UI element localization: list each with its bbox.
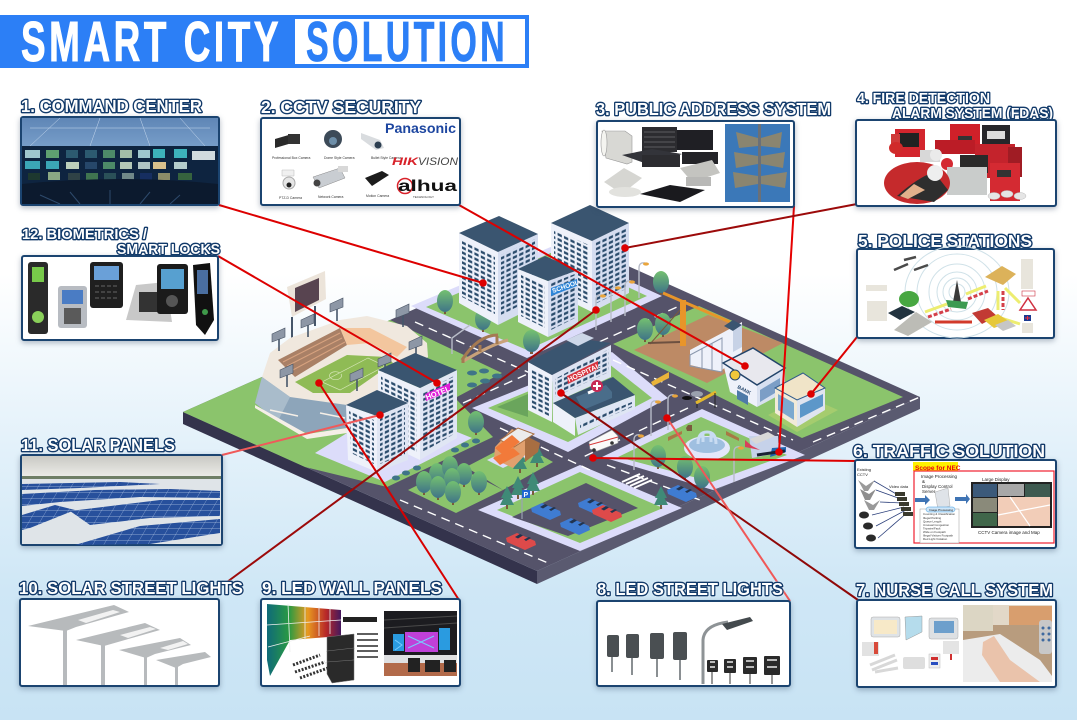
school building xyxy=(518,256,580,337)
title banner: SOLUTION xyxy=(306,10,508,74)
panel: 3 public address system xyxy=(596,99,831,207)
existing cctv cameras xyxy=(857,467,908,542)
server: Display Control xyxy=(922,484,953,489)
stadium outer ring xyxy=(262,316,428,406)
line 12 xyxy=(218,256,437,383)
line 9 xyxy=(319,383,459,600)
arrows xyxy=(915,494,970,505)
patient photo xyxy=(963,605,1052,682)
hotel sidewalk xyxy=(315,425,472,482)
line 6 xyxy=(593,458,856,461)
heading 5: 5. POLICE STATIONS xyxy=(858,231,1032,251)
server: & xyxy=(922,479,925,484)
warning signs xyxy=(1020,298,1036,321)
panel: 2 cctv security xyxy=(261,97,460,205)
line 7 xyxy=(561,393,858,600)
existing cctv cameras: Existing xyxy=(857,467,871,472)
led light heads xyxy=(607,632,687,680)
mount bars xyxy=(357,634,378,657)
controller unit xyxy=(343,617,377,622)
map platform xyxy=(183,240,920,584)
image processing list: Illegal Parking xyxy=(923,516,942,520)
panel: 11 solar panels xyxy=(21,435,222,545)
tree and car xyxy=(888,291,932,336)
server: Server xyxy=(922,489,936,494)
ambulance xyxy=(589,430,618,452)
title banner: SMART CITY xyxy=(21,10,282,74)
brand logos: alhua xyxy=(398,178,457,195)
line 11 xyxy=(222,415,380,455)
heading 7: 7. NURSE CALL SYSTEM xyxy=(856,580,1053,600)
scoreboard xyxy=(287,271,326,342)
camera captions: Bullet Style Camera xyxy=(371,156,401,160)
solar light 1 xyxy=(28,605,129,685)
heading 12: SMART LOCKS xyxy=(117,241,220,258)
panel: 6 traffic solution xyxy=(853,441,1056,548)
police station building xyxy=(768,373,838,432)
construction and bank block ground xyxy=(613,306,903,438)
hospital block ground xyxy=(472,352,668,452)
bus stop xyxy=(745,432,786,458)
heading 9: 9. LED WALL PANELS xyxy=(262,578,442,598)
tower block ground xyxy=(411,246,662,358)
image processing list: Red Light Violation xyxy=(923,537,948,541)
console desk xyxy=(22,179,218,204)
brand logos: VISION xyxy=(418,156,458,168)
solar light 3 xyxy=(119,638,191,685)
hospital building xyxy=(528,333,635,436)
brand logos: HIK xyxy=(392,156,419,168)
fountain park block ground xyxy=(602,409,805,490)
large display: Large Display xyxy=(982,477,1010,482)
hospital annex xyxy=(553,377,635,436)
stadium outer wall xyxy=(255,377,347,439)
line 10 xyxy=(227,310,596,582)
heading 12: 12. BIOMETRICS / xyxy=(22,226,148,243)
image processing list: Unusual Congestion xyxy=(923,523,949,527)
led video wall xyxy=(267,604,341,676)
hospital building: HOSPITAL xyxy=(567,362,602,384)
front tower xyxy=(346,390,408,472)
scope frame xyxy=(914,471,1054,543)
panel: 9 led wall panels xyxy=(261,578,460,686)
audio rack equipment xyxy=(604,127,720,202)
panel: 10 solar street lights xyxy=(19,578,243,686)
line 5 xyxy=(811,337,857,394)
tower crane xyxy=(648,293,730,346)
shop building xyxy=(493,428,540,468)
solar light 2 xyxy=(76,623,160,685)
construction site xyxy=(648,293,742,372)
heading 8: 8. LED STREET LIGHTS xyxy=(597,579,783,599)
school building: SCHOOL xyxy=(551,279,580,295)
signal rings xyxy=(905,246,1009,338)
camera captions: PTZ-D Camera xyxy=(279,196,302,200)
line 2 xyxy=(459,205,745,366)
flight cases xyxy=(327,634,354,683)
monitor wall xyxy=(25,149,215,180)
brand logos: TECHNOLOGY xyxy=(413,195,434,199)
camera captions: Motion Camera xyxy=(366,194,389,198)
stadium block ground xyxy=(183,320,502,487)
line 3 xyxy=(779,206,794,452)
image processing list: Counting & Classification xyxy=(923,512,956,516)
heading 10: 10. SOLAR STREET LIGHTS xyxy=(19,578,243,598)
medical cross sign xyxy=(591,380,603,392)
image processing list: Tripwire/Fault xyxy=(923,526,941,530)
scope label: Scope for NEC xyxy=(915,465,961,472)
heading 11: 11. SOLAR PANELS xyxy=(21,435,175,455)
video data encoders xyxy=(889,484,913,516)
heading 4 xyxy=(857,90,1053,122)
smoke detectors xyxy=(988,190,1026,200)
road barriers and manhole xyxy=(651,372,716,408)
panel: 7 nurse call system xyxy=(856,580,1056,687)
sky xyxy=(22,456,221,478)
camera captions xyxy=(272,156,401,200)
floodlights xyxy=(272,298,422,391)
image processing list: Queue Length xyxy=(923,520,942,524)
brand logos xyxy=(385,121,458,199)
red fire alarm panels xyxy=(889,124,1022,201)
camera captions: Network Camera xyxy=(318,195,344,199)
horn speaker xyxy=(602,131,632,164)
roof xyxy=(22,479,221,544)
control room xyxy=(985,266,1016,285)
image processing list xyxy=(920,507,959,543)
stage photo xyxy=(384,611,457,676)
horizon trees xyxy=(22,476,221,479)
solar led heads xyxy=(707,656,780,684)
emergency vehicles xyxy=(972,308,1016,331)
solar light 4 xyxy=(156,652,211,685)
satellites xyxy=(894,257,928,270)
panel: 4 fire detection alarm system xyxy=(856,90,1056,206)
camera captions: Professional Box Camera xyxy=(272,156,311,160)
heading 4: ALARM SYSTEM (FDAS) xyxy=(892,105,1053,122)
trees xyxy=(392,271,710,509)
biometric devices xyxy=(28,262,214,335)
connector end dots xyxy=(315,244,815,462)
footbridge xyxy=(462,335,508,363)
large display xyxy=(971,477,1052,535)
large display: CCTV Camera image and Map xyxy=(978,530,1040,535)
brand logos: Panasonic xyxy=(385,121,457,136)
heading 1: 1. COMMAND CENTER xyxy=(21,96,202,116)
heading 6: 6. TRAFFIC SOLUTION xyxy=(853,441,1045,461)
camera captions: Dome Style Camera xyxy=(324,156,355,160)
hotel building xyxy=(378,353,457,460)
solar arrays xyxy=(22,482,220,545)
panel: 8 led street lights xyxy=(597,579,790,686)
information notes xyxy=(866,259,1035,333)
heading 12 xyxy=(22,226,220,258)
bank building xyxy=(723,348,785,407)
video data encoders: Video data xyxy=(889,484,909,489)
server: Image Processing xyxy=(921,474,958,479)
unfinished building xyxy=(690,320,742,372)
speaker tower photo xyxy=(725,124,790,202)
gray control panel xyxy=(947,167,987,195)
line 1 xyxy=(219,205,483,283)
radio tower xyxy=(953,280,961,302)
street lamps xyxy=(452,262,744,482)
fountain and plaza xyxy=(668,425,739,460)
connector lines xyxy=(218,204,858,601)
image processing list: Image Processing xyxy=(929,508,953,512)
shop and grove ground xyxy=(408,441,553,513)
parking sign xyxy=(522,490,530,519)
tower behind right xyxy=(551,205,629,312)
tower left xyxy=(459,216,538,325)
nurse console devices xyxy=(862,616,959,672)
scope label xyxy=(913,462,961,472)
stadium xyxy=(255,271,428,439)
camera icons xyxy=(275,130,389,189)
server xyxy=(921,474,958,510)
parking block ground xyxy=(478,465,682,551)
vehicles xyxy=(506,485,697,550)
image processing list: Illegal Visitors Footpath xyxy=(923,534,953,538)
image processing list: Wide on Footpath xyxy=(923,530,946,534)
radio arrows xyxy=(925,286,1020,324)
heading 2: 2. CCTV SECURITY xyxy=(261,97,421,117)
light pole xyxy=(703,617,753,684)
panel: 12 biometrics smart locks xyxy=(22,226,220,340)
line 4 xyxy=(625,204,857,248)
bank building: BANK xyxy=(736,384,752,397)
existing cctv cameras: CCTV xyxy=(857,472,868,477)
line 8 xyxy=(667,418,790,601)
isometric city map xyxy=(183,205,920,584)
hotel building: HOTEL xyxy=(424,384,452,402)
parking sign: P xyxy=(524,492,528,499)
panel: 5 police stations xyxy=(857,231,1054,338)
panel: 1 command center xyxy=(21,96,219,205)
road markings xyxy=(400,307,920,563)
heading 4: 4. FIRE DETECTION xyxy=(857,90,990,107)
heading 3: 3. PUBLIC ADDRESS SYSTEM xyxy=(596,99,831,119)
cables xyxy=(293,655,328,678)
technician photo xyxy=(884,162,950,204)
